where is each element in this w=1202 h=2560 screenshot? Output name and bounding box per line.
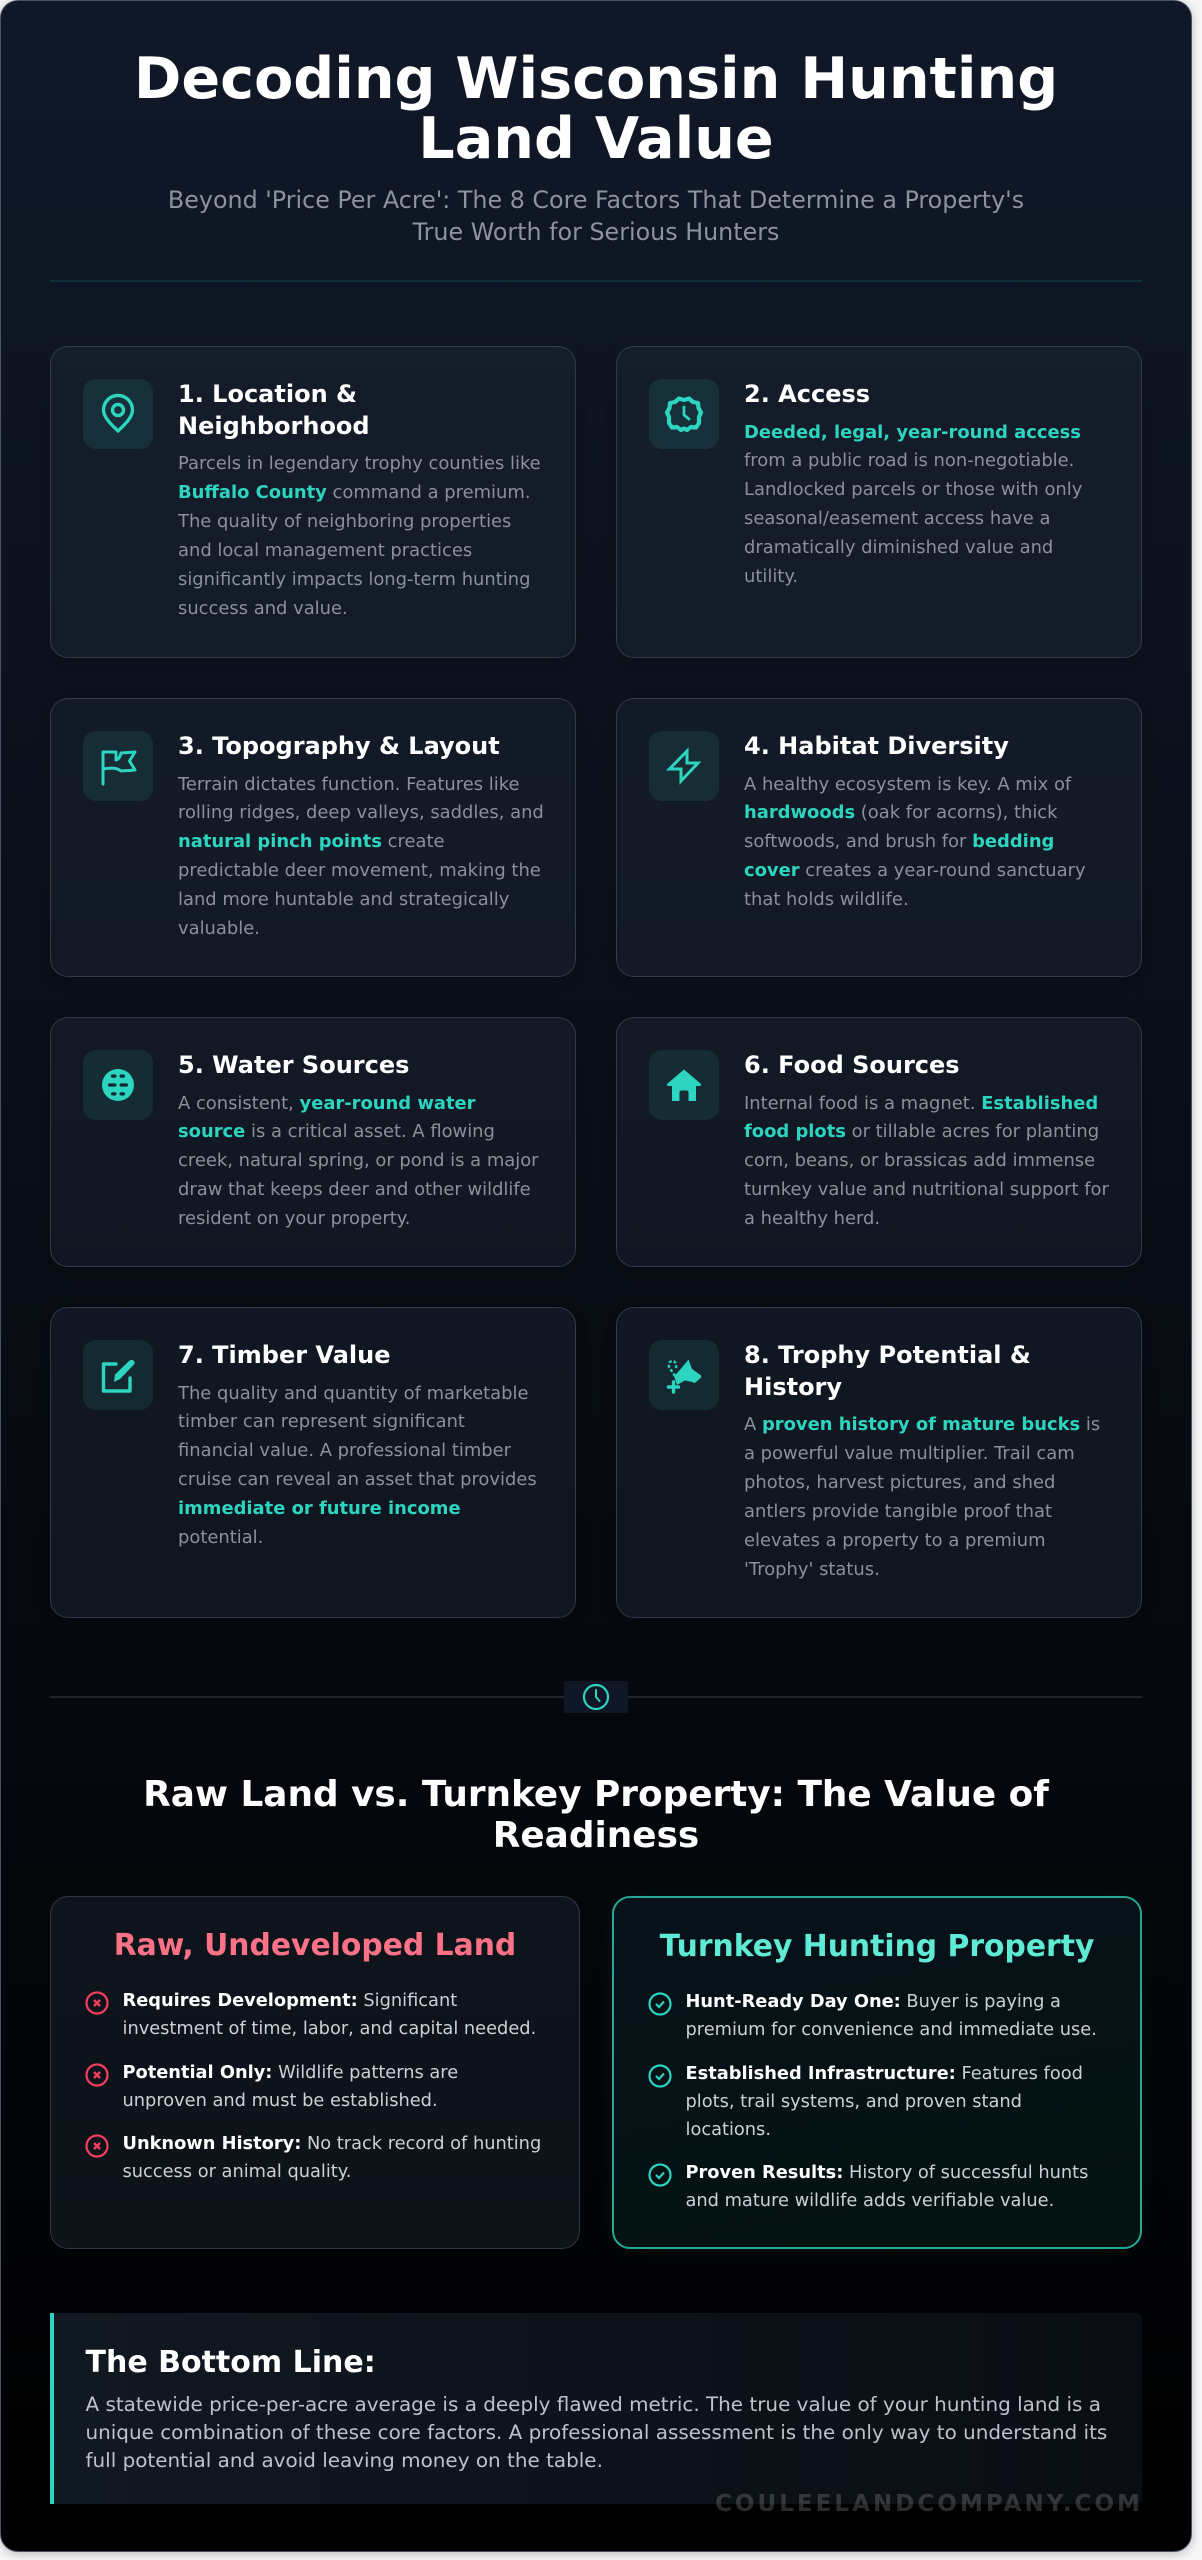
text: food: a healthy herd. [744,1208,880,1229]
text: water: source is a critical asset. A flowing [178,1121,495,1142]
text: success or animal quality. [122,2161,351,2182]
subtitle: True Worth for Serious Hunters [413,218,779,246]
text: habitat: cover creates a year-round sanctuary [744,860,1086,881]
text: food: corn, beans, or brassicas add immense [744,1150,1095,1171]
text: food: 6. Food Sources [744,1051,960,1079]
text: access: from a public road is non-negotiable. [744,450,1074,471]
text: timber: cruise can reveal an asset that provides [178,1469,537,1490]
text: food: food plots or tillable acres for planting [744,1121,1099,1142]
icon: x circle [85,2134,109,2158]
text: location: Neighborhood [178,412,370,440]
text: unproven and must be established. [122,2090,438,2111]
subtitle [168,186,1024,246]
text: premium for convenience and immediate use. [686,2019,1097,2040]
text: locations. [686,2119,771,2140]
title: Decoding Wisconsin Hunting [134,46,1058,112]
text: access: utility. [744,566,798,587]
item: hunt-ready [648,1991,1097,2040]
text: water: creek, natural spring, or pond is a major [178,1150,539,1171]
text: plots, trail systems, and proven stand [686,2091,1022,2112]
text [686,1991,1097,2040]
heading: raw land vs turnkey: Raw Land vs. Turnkey Property: The Value of [143,1774,1049,1815]
item: requires development [85,1990,536,2039]
text: food [744,1051,1109,1229]
text: bottom line: unique combination of these core factors. A professional assessment is the only way to understand its [86,2420,1107,2444]
icon: bolt [649,731,719,801]
panel: 2 access [616,346,1142,658]
text: timber [178,1341,537,1548]
watermark: COULEELANDCOMPANY.COM [715,2491,1143,2517]
text: Established Infrastructure: Features food [686,2063,1083,2084]
text: timber: timber can represent significant [178,1411,465,1432]
text: trophy: 8. Trophy Potential & [744,1341,1031,1369]
text: water: A consistent, year-round water [178,1092,476,1114]
icon: map pin [83,379,153,449]
text: access: 2. Access [744,380,870,408]
text: water: draw that keeps deer and other wildlife [178,1179,531,1200]
panel: 1 location and neighborhood [50,346,576,658]
icon: flag [83,731,153,801]
heading: bottom line: The Bottom Line: [86,2345,376,2380]
icon: x circle [85,2063,109,2087]
text: access: Landlocked parcels or those with only [744,479,1082,500]
text: bottom line [86,2392,1107,2472]
text: Requires Development: Significant [122,1990,457,2011]
panel: turnkey hunting property [612,1896,1142,2249]
title: Land Value [418,106,774,172]
icon: check circle [648,2163,672,2187]
heading: raw land vs turnkey: Readiness [493,1814,699,1856]
panel: 5 water [50,1017,576,1267]
panel: 4 habitat [616,698,1142,977]
text: food: turnkey value and nutritional support for [744,1179,1109,1200]
panel: 8 trophy [616,1307,1142,1618]
icon: water grid [83,1050,153,1120]
icon: section divider clock [564,1681,628,1713]
panel: raw undeveloped land [50,1896,580,2249]
heading: raw land: Raw, Undeveloped Land [114,1928,516,1963]
heading: raw land vs turnkey [143,1774,1050,1856]
item: potential only [85,2062,458,2111]
text: habitat: 4. Habitat Diversity [744,732,1009,760]
text: Potential Only: Wildlife patterns are [122,2062,458,2083]
text: food: Internal food is a magnet. Established [744,1092,1098,1114]
text: and mature wildlife adds verifiable value. [686,2190,1054,2211]
text: topography: 3. Topography & Layout [178,732,500,760]
text: trophy: A proven history of mature bucks is [744,1414,1100,1435]
subtitle: Beyond 'Price Per Acre': The 8 Core Factors That Determine a Property's [168,186,1024,214]
text: location: 1. Location & [178,380,357,408]
text: topography [178,732,544,939]
heading: turnkey: Turnkey Hunting Property [660,1929,1094,1964]
text: access: Deeded, legal, year-round access [744,422,1081,442]
text: habitat [744,732,1086,910]
text: water: 5. Water Sources [178,1051,409,1079]
text: location: success and value. [178,598,348,619]
text: bottom line: full potential and avoid leaving money on the table. [86,2448,603,2472]
text: location [178,380,541,619]
text: access [744,380,1082,587]
text [686,2162,1088,2211]
text: timber: potential. [178,1527,263,1548]
text: access: dramatically diminished value and [744,537,1053,558]
text: location: The quality of neighboring properties [178,511,511,532]
panel: 7 timber [50,1307,576,1618]
text: trophy [744,1341,1100,1580]
text: timber: financial value. A professional timber [178,1440,511,1461]
text: trophy: antlers provide tangible proof that [744,1501,1052,1522]
icon: check circle [648,2064,672,2088]
text: access: seasonal/easement access have a [744,508,1050,529]
text: habitat: that holds wildlife. [744,889,909,910]
text: bottom line: A statewide price-per-acre average is a deeply flawed metric. The true value of your hunting land is a [86,2392,1101,2416]
text: trophy: 'Trophy' status. [744,1559,880,1580]
text: timber: immediate or future income [178,1498,461,1519]
item: infrastructure [648,2063,1083,2140]
text: trophy: photos, harvest pictures, and shed [744,1472,1055,1493]
text: topography: land more huntable and strategically [178,889,509,910]
icon: check circle [648,1992,672,2016]
title [134,46,1058,172]
text: habitat: softwoods, and brush for bedding [744,831,1054,852]
icon: trophy antler [649,1340,719,1410]
text: location: Buffalo County command a premium. [178,482,531,503]
text: location: and local management practices [178,540,472,561]
icon: x circle [85,1991,109,2015]
icon: house [649,1050,719,1120]
text: water: resident on your property. [178,1208,410,1229]
text: topography: valuable. [178,918,260,939]
icon: clock badge [649,379,719,449]
text: topography: rolling ridges, deep valleys, saddles, and [178,802,544,823]
panel: the bottom line [50,2313,1142,2504]
text: Hunt-Ready Day One: Buyer is paying a [686,1991,1061,2012]
panel: 6 food [616,1017,1142,1267]
text: trophy: a powerful value multiplier. Trail cam [744,1443,1075,1464]
text: topography: predictable deer movement, making the [178,860,541,881]
text [122,1990,536,2039]
text: timber: 7. Timber Value [178,1341,390,1369]
text: Unknown History: No track record of hunting [122,2133,541,2154]
text: timber: The quality and quantity of marketable [178,1382,528,1404]
text: location: significantly impacts long-term hunting [178,569,530,590]
text: habitat: A healthy ecosystem is key. A mix of [744,774,1071,794]
text [122,2062,458,2111]
text [122,2133,541,2182]
item: proven results [648,2162,1088,2211]
text: investment of time, labor, and capital needed. [122,2018,536,2039]
text: Proven Results: History of successful hunts [686,2162,1088,2183]
text: topography: natural pinch points create [178,831,444,852]
text: trophy: elevates a property to a premium [744,1530,1046,1551]
text: location: Parcels in legendary trophy counties like [178,453,541,474]
panel: 3 topography [50,698,576,977]
text [686,2063,1083,2140]
text: water [178,1051,539,1229]
item: unknown history [85,2133,541,2182]
text: habitat: hardwoods (oak for acorns), thick [744,802,1058,823]
icon: edit [83,1340,153,1410]
text: topography: Terrain dictates function. Features like [178,774,519,794]
text: trophy: History [744,1372,842,1400]
